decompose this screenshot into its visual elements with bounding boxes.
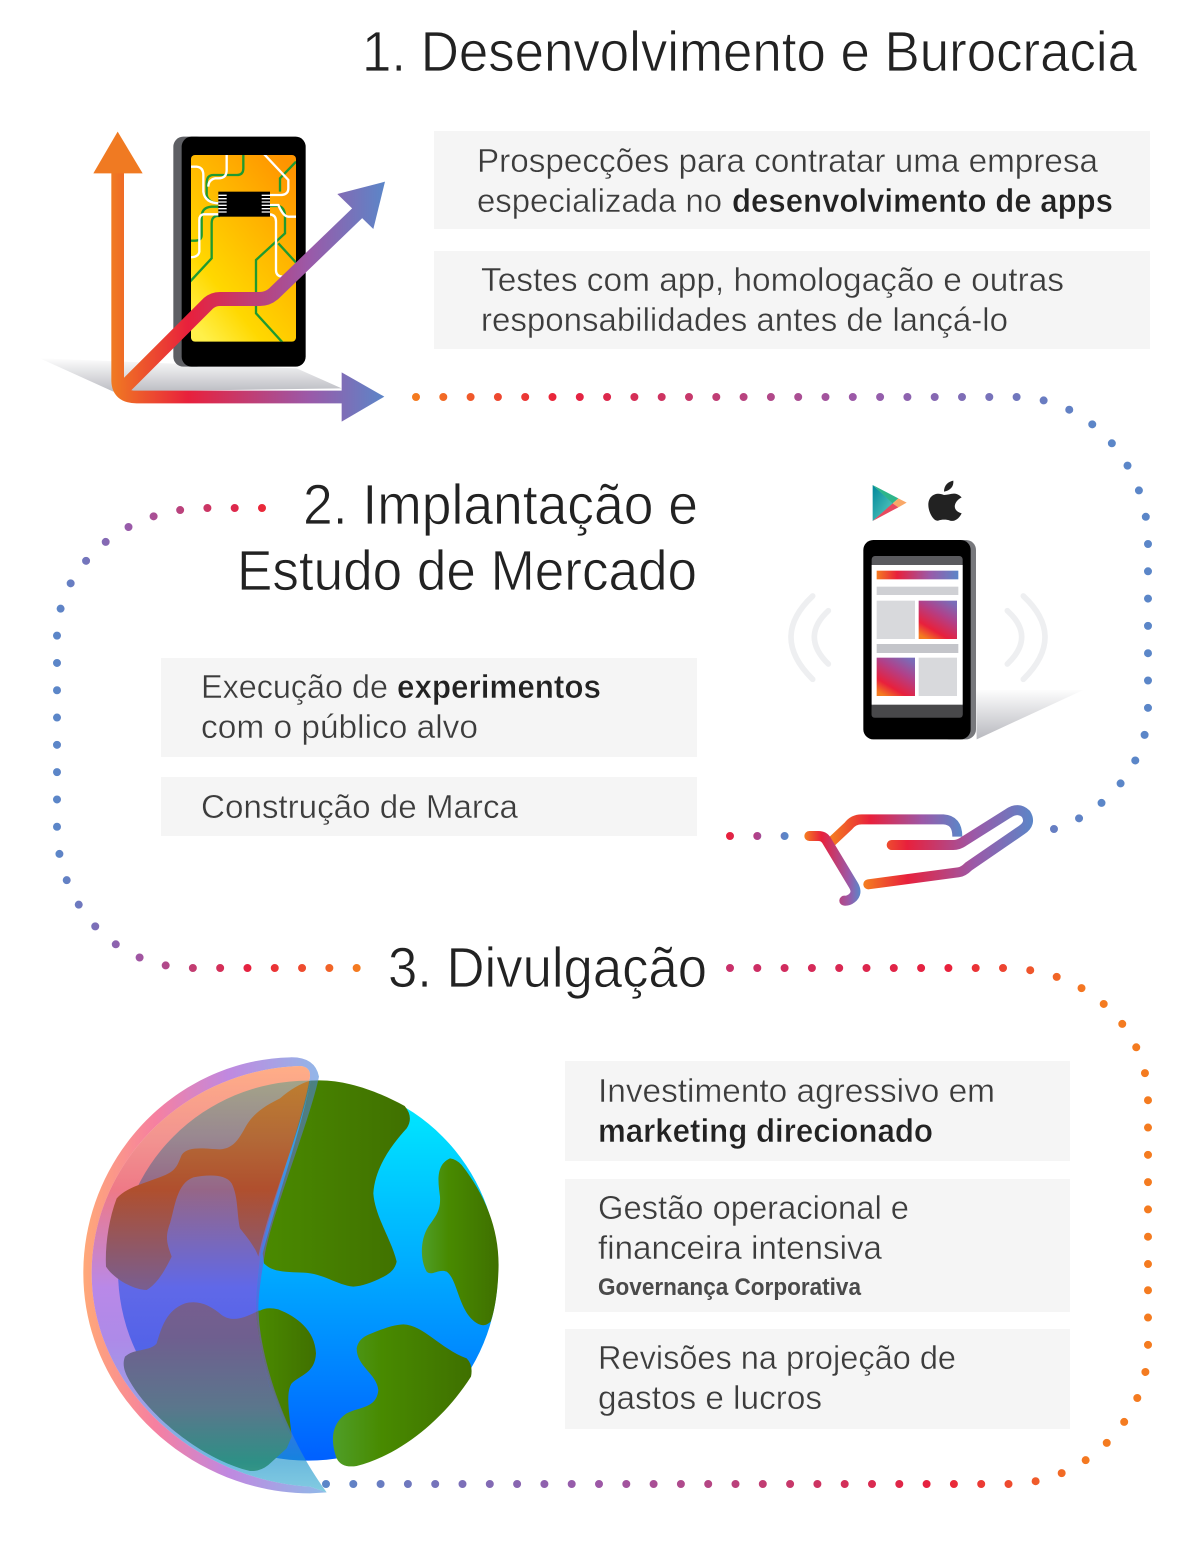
panel: experiments text: Execução de — [201, 668, 388, 705]
panel: app development text: desenvolvimento de apps — [732, 182, 1113, 219]
chip — [218, 192, 270, 217]
panel: app development text — [434, 131, 1150, 229]
panel: marketing text: marketing direcionado — [598, 1112, 933, 1149]
circuit traces — [190, 153, 297, 343]
heading: section 2: Estudo de Mercado — [237, 539, 697, 603]
phone with app screen — [863, 540, 976, 739]
heading: section 2: 2. Implantação e — [303, 473, 698, 537]
icon: play store — [873, 485, 907, 521]
panel: marketing text — [565, 1061, 1070, 1161]
panel: experiments text: experimentos — [397, 668, 601, 705]
panel: management text: Governança Corporativa — [598, 1274, 862, 1301]
dotted path: section 1 to hand — [416, 397, 1148, 836]
panel: projections text: Revisões na projeção de — [598, 1339, 956, 1376]
panel: tests text: Testes com app, homologação e outras — [481, 261, 1064, 298]
dotted path: section 2 to section 3 — [57, 508, 358, 968]
dotted path: section 3 to globe — [326, 968, 1148, 1484]
panel: brand text — [161, 777, 697, 836]
continents right — [259, 1080, 499, 1466]
panel: marketing text: Investimento agressivo em — [598, 1072, 995, 1109]
icon: globe with peeled shell — [83, 1057, 499, 1493]
panel: management text: financeira intensiva — [598, 1229, 883, 1266]
shell outer band — [83, 1057, 327, 1493]
axes arrows — [93, 132, 384, 422]
panel: management text — [565, 1179, 1070, 1312]
ocean sphere — [118, 1081, 498, 1461]
floor shadow — [40, 358, 342, 392]
panel: management text: Gestão operacional e — [598, 1189, 909, 1226]
panel: projections text: gastos e lucros — [598, 1379, 822, 1416]
panel: experiments text: com o público alvo — [201, 708, 478, 745]
panel: projections text — [565, 1329, 1070, 1429]
panel: app development text: especializada no — [477, 182, 722, 219]
heading: section 3: 3. Divulgação — [388, 936, 707, 1000]
icon: apple logo — [928, 481, 962, 521]
icon: phone with circuit and growth arrows — [40, 132, 385, 422]
heading: section 2 — [237, 473, 698, 603]
heading: section 1: 1. Desenvolvimento e Burocracia — [362, 20, 1137, 84]
continents left — [106, 1081, 311, 1471]
icon group: store logos, phone and hand — [791, 481, 1083, 901]
shell inner fill — [92, 1066, 327, 1492]
panel: tests text — [434, 251, 1150, 349]
panel: app development text: Prospecções para contratar uma empresa — [477, 142, 1099, 179]
phone shadow — [976, 690, 1083, 739]
phone body — [173, 137, 306, 367]
signal waves — [791, 596, 1045, 679]
panel: tests text: responsabilidades antes de lançá-lo — [481, 301, 1008, 338]
panel: experiments text — [161, 658, 697, 757]
panel: brand text: Construção de Marca — [201, 788, 519, 825]
icon: hand — [809, 810, 1028, 901]
growth arrow — [122, 182, 385, 390]
